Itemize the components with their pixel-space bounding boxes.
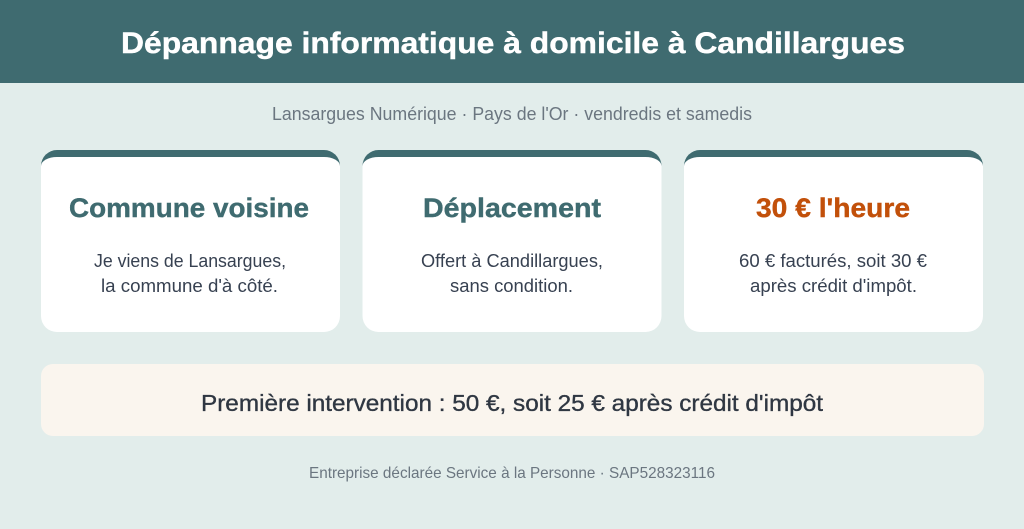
card text: 60 € facturés, soit 30 € [739, 251, 927, 271]
panel: déplacement [362, 150, 662, 332]
card text: la commune d'à côté. [101, 276, 278, 296]
card text: après crédit d'impôt. [750, 276, 917, 296]
panel: commune voisine [41, 150, 340, 332]
card text: Offert à Candillargues, [421, 251, 603, 271]
subtitle: Lansargues Numérique · Pays de l'Or · vendredis et samedis [272, 104, 752, 124]
card text [94, 251, 286, 296]
panel: tarif horaire [684, 150, 983, 332]
card heading: Commune voisine [69, 193, 309, 223]
title: Dépannage informatique à domicile à Candillargues [121, 27, 905, 60]
card text [421, 251, 603, 296]
footer note: Entreprise déclarée Service à la Personne · SAP528323116 [309, 465, 715, 482]
card text: Je viens de Lansargues, [94, 251, 286, 271]
card heading: 30 € l'heure [756, 193, 910, 223]
card text: sans condition. [450, 276, 573, 296]
callout: première intervention [41, 364, 984, 436]
card heading: Déplacement [423, 193, 601, 223]
card text [739, 251, 927, 296]
callout text: Première intervention : 50 €, soit 25 € après crédit d'impôt [201, 390, 824, 416]
header band with title [0, 0, 1024, 83]
